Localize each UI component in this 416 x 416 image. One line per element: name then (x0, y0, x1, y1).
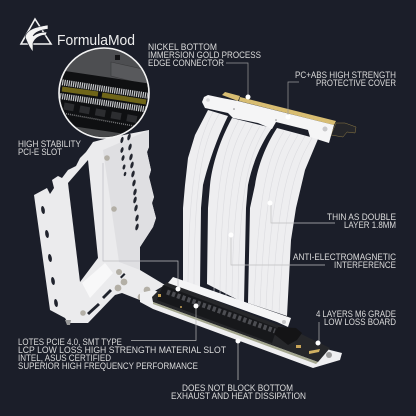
callout: anti-electromagnetic interference (228, 232, 396, 271)
ribbon 3 (248, 128, 318, 316)
bracket screws (80, 155, 150, 316)
white slot cover (168, 277, 291, 327)
callout: Lotes PCIe 4.0 slot: SUPERIOR HIGH FREQUENCY PERFORMANCE (18, 361, 198, 372)
callout: does not block bottom exhaust: EXHAUST AND HEAT DISSIPATION (171, 391, 306, 402)
ribbon 1 (183, 110, 228, 288)
callout: Lotes PCIe 4.0 slot: INTEL, ASUS CERTIFIED (18, 353, 111, 364)
protective cover bar (202, 95, 334, 143)
inset circle: PCI-E slot close-up (58, 48, 152, 140)
callout: nickel bottom gold process: IMMERSION GOLD PROCESS (148, 50, 261, 61)
callout: high stability PCI-E slot: PCI-E SLOT (18, 147, 62, 158)
slot teeth (167, 292, 275, 331)
callout: does not block bottom exhaust: DOES NOT BLOCK BOTTOM (182, 383, 293, 394)
chips (64, 106, 150, 122)
callout: anti-electromagnetic interference: ANTI-ELECTROMAGNETIC (293, 252, 396, 263)
bracket silhouette (34, 130, 165, 323)
logo: FormulaMod: FormulaMod (57, 33, 135, 49)
callout: nickel bottom gold process: NICKEL BOTTOM (148, 42, 217, 53)
ribbon 2 (207, 118, 272, 303)
callout: 4 layers M6 grade: LOW LOSS BOARD (324, 317, 396, 328)
bottom PCIe slot board (140, 277, 342, 368)
PCB (152, 282, 330, 362)
callout: high stability PCI-E slot (18, 139, 82, 158)
callout: high stability PCI-E slot: HIGH STABILITY (18, 139, 82, 150)
callout: anti-electromagnetic interference: INTERFERENCE (334, 260, 396, 271)
top edge connector (202, 92, 356, 143)
bracket window (68, 160, 98, 282)
gold contacts on PCB (309, 349, 320, 354)
callout: thin as double layer (268, 200, 396, 231)
bottom pin (65, 320, 71, 325)
olive board edge (153, 302, 318, 364)
callout: 4 layers M6 grade: 4 LAYERS M6 GRADE (316, 309, 396, 320)
callout: PC+ABS protective cover: PROTECTIVE COVER (316, 78, 396, 89)
foot slots (87, 273, 126, 315)
callout: 4 layers M6 grade (316, 309, 396, 346)
white base plate (140, 290, 342, 368)
bracket: white vertical mount (34, 130, 165, 325)
callout: does not block bottom exhaust (171, 338, 306, 402)
dark PCB end (331, 123, 356, 137)
callout: nickel bottom gold process (148, 42, 261, 100)
callout: thin as double layer: LAYER 1.8MM (344, 220, 396, 231)
connector rows (60, 82, 150, 96)
latch (274, 327, 302, 345)
gold fingers (222, 92, 240, 101)
callout: Lotes PCIe 4.0 slot: LCP LOW LOSS HIGH STRENGTH MATERIAL SLOT (18, 345, 226, 356)
callout: Lotes PCIe 4.0 slot (18, 304, 226, 372)
left arm holes (41, 206, 58, 307)
slot body (157, 285, 277, 343)
rear plate slots (120, 133, 139, 231)
riser ribbon cables (183, 110, 318, 316)
leader line: slot stability (103, 163, 180, 292)
callout: PC+ABS protective cover: PC+ABS HIGH STRENGTH (295, 70, 396, 81)
callout: Lotes PCIe 4.0 slot: LOTES PCIE 4.0, SMT TYPE (18, 337, 122, 348)
callout: PC+ABS protective cover (286, 70, 396, 120)
callout: nickel bottom gold process: EDGE CONNECTOR (148, 58, 224, 69)
callout: thin as double layer: THIN AS DOUBLE (327, 212, 396, 223)
lower gusset shade (82, 263, 113, 298)
logo: FormulaMod (21, 19, 135, 52)
rear plate shade (103, 130, 156, 270)
ribbon stripes (188, 112, 312, 313)
